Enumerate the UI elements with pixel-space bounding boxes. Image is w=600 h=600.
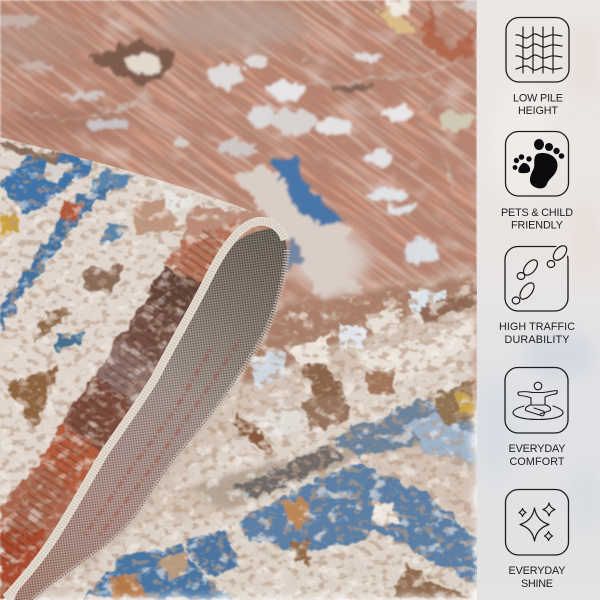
feature: pets and child friendly	[501, 132, 573, 232]
icon: low pile weave	[506, 18, 569, 82]
floral motifs	[0, 0, 477, 300]
icon: seated figure	[505, 368, 568, 433]
label: HEIGHT	[518, 105, 558, 117]
label: EVERYDAY	[508, 565, 566, 577]
label: COMFORT	[510, 456, 565, 468]
label: EVERYDAY	[508, 443, 566, 455]
vine lines	[0, 30, 470, 200]
feature: everyday comfort	[505, 368, 568, 468]
rug hem binding	[6, 221, 285, 598]
cream flower and blue streak	[232, 155, 415, 300]
icon: sparkles	[506, 490, 568, 555]
background rug field	[0, 0, 477, 400]
feature: low pile height	[506, 18, 569, 117]
label: LOW PILE	[513, 92, 563, 104]
side features panel	[477, 0, 600, 600]
label: FRIENDLY	[511, 220, 563, 232]
label: PETS & CHILD	[501, 207, 573, 219]
feature: high traffic durability	[499, 243, 575, 346]
feature: everyday shine	[506, 490, 568, 590]
rolled rug front face	[0, 137, 264, 600]
blue motifs	[0, 140, 195, 430]
dark medallion	[85, 41, 178, 85]
rug photo	[0, 0, 477, 600]
brown border stripe	[0, 205, 280, 600]
label: HIGH TRAFFIC	[499, 321, 575, 333]
icon: footprints	[505, 243, 569, 311]
border ribs	[0, 238, 215, 560]
label: SHINE	[521, 578, 553, 590]
label: DURABILITY	[504, 334, 570, 346]
lower patterned border	[0, 262, 477, 600]
icon: paw and foot	[506, 132, 568, 196]
rug underside	[14, 228, 287, 600]
